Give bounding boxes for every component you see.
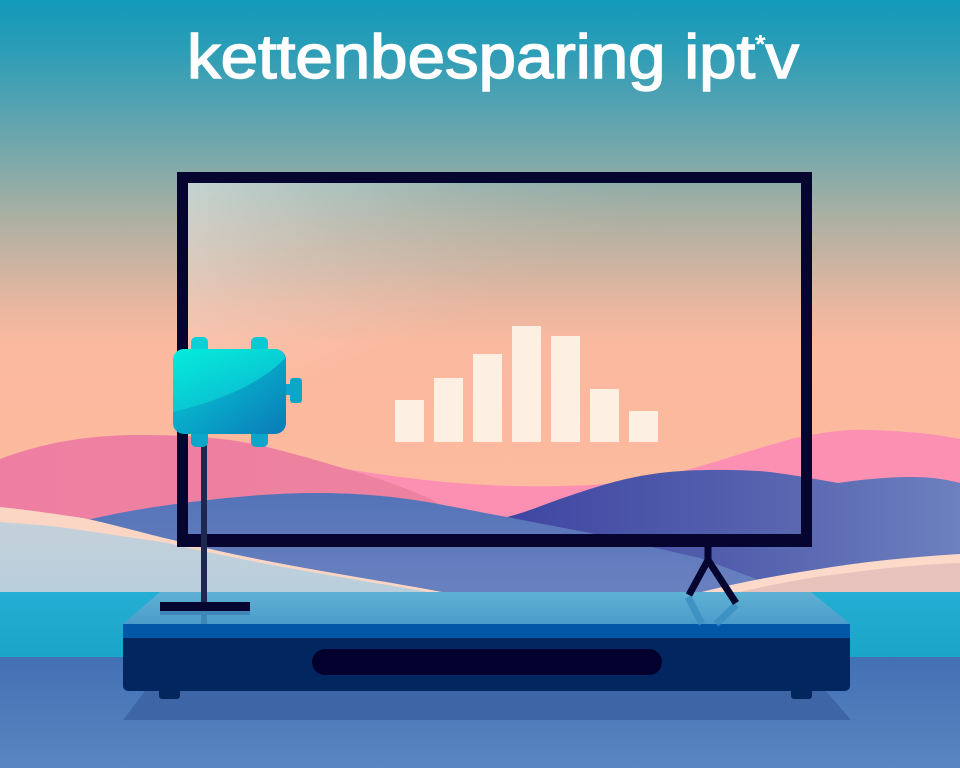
device highlight (173, 349, 285, 412)
hill: peach left (0, 507, 447, 593)
media console (123, 592, 851, 720)
pole reflection (160, 611, 250, 624)
hill: pink left (0, 435, 480, 530)
title: * (755, 31, 765, 58)
hill: blue middle (87, 493, 813, 600)
title: v (765, 23, 799, 92)
television (177, 172, 812, 624)
pole base (160, 602, 250, 611)
hill: pale left (0, 522, 433, 593)
console front band (123, 624, 850, 638)
tv stand (689, 547, 736, 603)
console shadow (123, 691, 851, 720)
tv stand reflection (688, 597, 736, 624)
tv frame (177, 172, 812, 547)
bar chart (395, 326, 658, 442)
hill: peach right (698, 554, 960, 593)
device tabs and connector (191, 337, 302, 447)
rolling hills (0, 430, 960, 600)
hill: indigo right (507, 470, 960, 600)
console slot (312, 649, 662, 675)
console body (123, 638, 850, 691)
console top surface (123, 592, 850, 624)
background sky gradient (0, 0, 960, 600)
device body (173, 349, 286, 434)
water band (0, 592, 960, 657)
hill: pink right (340, 430, 960, 600)
hill: pale right (735, 563, 960, 593)
tv screen glass (188, 183, 506, 349)
floor (0, 657, 960, 768)
device on pole (160, 337, 302, 624)
console feet (159, 688, 812, 699)
pole (201, 440, 207, 605)
title: kettenbesparing ipt (187, 23, 711, 92)
